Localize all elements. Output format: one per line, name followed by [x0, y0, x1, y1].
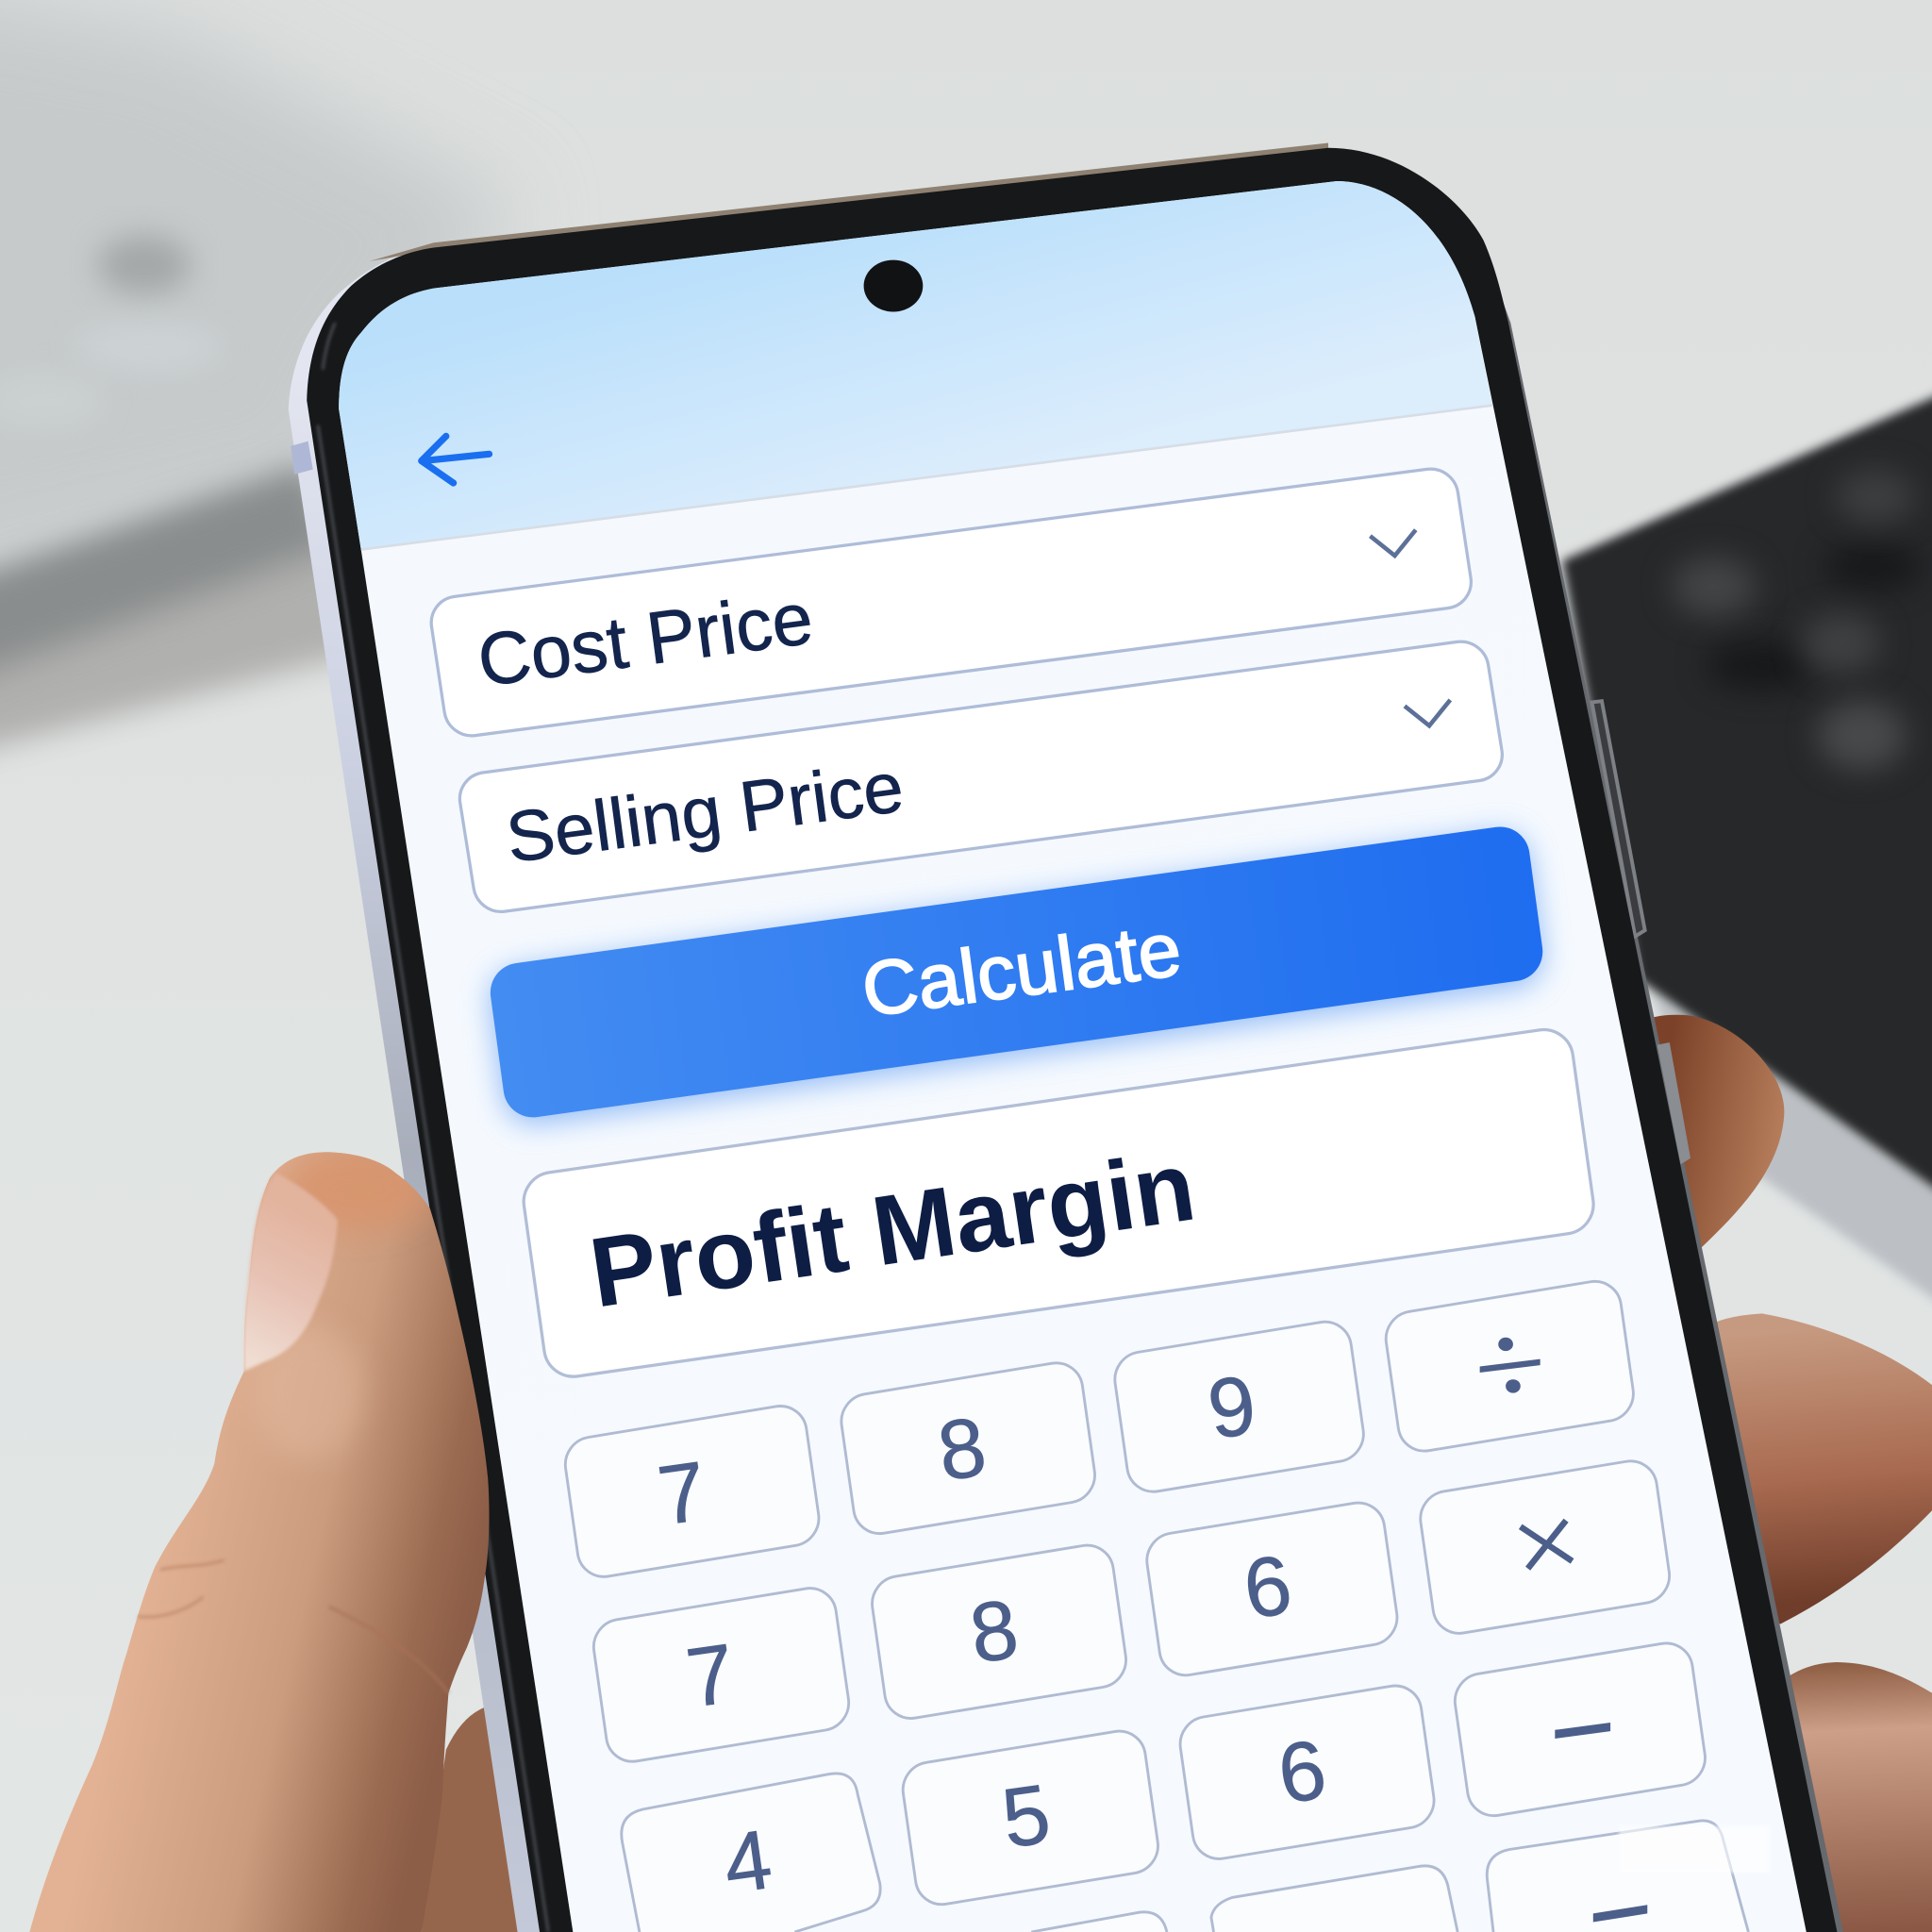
- frame highlight band: [291, 441, 313, 475]
- fingers behind the phone: [422, 1015, 1932, 1932]
- header divider: [361, 406, 1492, 550]
- thumb knuckle crease: [329, 1607, 448, 1693]
- thumb wrinkles: [138, 1560, 225, 1617]
- keypad digits: 6: [1273, 1723, 1332, 1822]
- keypad digits: 4: [718, 1812, 777, 1911]
- thumb nail: [243, 1173, 338, 1372]
- phone bezel: [307, 148, 1837, 1932]
- thumb shading: [253, 1147, 431, 1460]
- finger: middle right: [1700, 1313, 1932, 1624]
- keypad digits: 8: [932, 1400, 991, 1499]
- keypad digits: 6: [1238, 1538, 1297, 1637]
- side button: upper: [1592, 701, 1645, 937]
- keypad digits: 5: [996, 1767, 1056, 1866]
- keypad: [562, 1277, 1748, 1932]
- result panel: profit margin: [520, 1025, 1597, 1380]
- operator: minus: [1555, 1723, 1610, 1739]
- faint watermark smudge: [1619, 1826, 1770, 1873]
- keypad digits: 7: [681, 1626, 741, 1725]
- field: selling price: [456, 639, 1506, 915]
- finger: upper right: [1639, 1015, 1784, 1255]
- calculate button: [487, 823, 1546, 1127]
- finger: lower left: [422, 1707, 591, 1932]
- keypad digits: [653, 1357, 1332, 1911]
- phone frame right strip: [1478, 234, 1843, 1932]
- operator: multiply: [1521, 1521, 1573, 1569]
- phone metal frame left: [289, 245, 555, 1932]
- keypad digits: 7: [653, 1444, 712, 1543]
- hand: thumb: [29, 1147, 490, 1932]
- label: calculate: Calculate: [858, 907, 1186, 1034]
- icon: chevron: [1405, 700, 1450, 725]
- camera: [864, 260, 923, 311]
- keypad digits: 8: [964, 1582, 1024, 1681]
- icon: chevron: [1370, 530, 1416, 556]
- operator: minus lower: [1593, 1905, 1647, 1923]
- icon: back arrow: [422, 436, 490, 483]
- phone screen: [339, 181, 1807, 1932]
- operator: divide: [1480, 1338, 1541, 1393]
- field: cost price: [427, 466, 1474, 739]
- side button: lower: [1657, 1042, 1690, 1164]
- phone: [289, 143, 1843, 1932]
- label: profit margin: Profit Margin: [583, 1131, 1202, 1328]
- bezel stripe: [318, 323, 548, 1932]
- screen header: [339, 181, 1492, 550]
- top frame brown edge: [370, 143, 1328, 261]
- label: cost price: Cost Price: [473, 576, 817, 702]
- dark keyboard in background: [1562, 370, 1932, 1343]
- keypad digits: 9: [1202, 1357, 1261, 1457]
- label: selling price: Selling Price: [502, 747, 908, 878]
- finger: lower right: [1774, 1662, 1932, 1932]
